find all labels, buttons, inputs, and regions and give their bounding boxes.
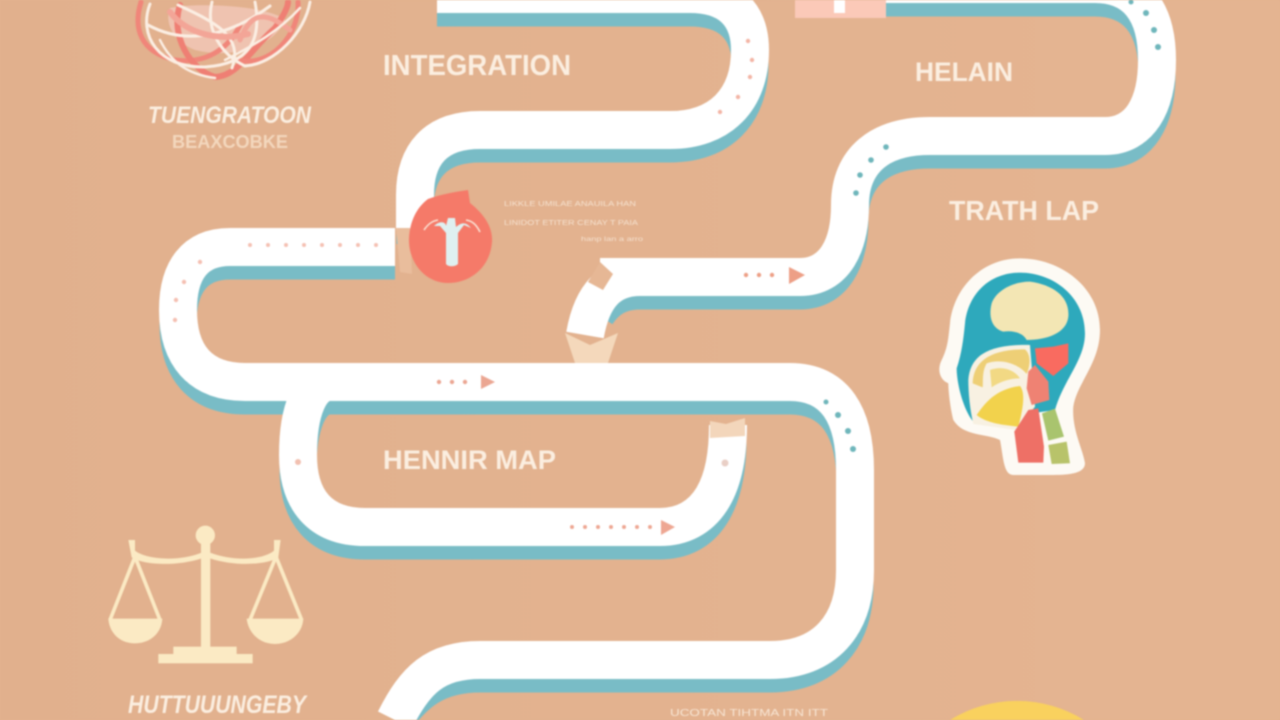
road stub: curve into central tab (585, 277, 640, 335)
subheading: tangle caption: BEAXCOBKE (172, 132, 288, 152)
road arrow: main horizontal (437, 375, 495, 389)
tab: notch at central road start (588, 262, 613, 290)
sinus pieces (973, 349, 1030, 387)
winding road: white path (178, 0, 1157, 720)
road segment: top centre (415, 0, 750, 230)
icon: balance scales (108, 526, 303, 663)
heading: tangle caption (148, 102, 312, 152)
throat upper (1035, 343, 1068, 376)
tab: pink label at top (795, 0, 886, 18)
brain (990, 282, 1068, 340)
road dots: left bend (173, 243, 378, 322)
face area (968, 345, 1035, 430)
road segment: right side (600, 0, 1157, 277)
icon: red circle with figure (396, 190, 492, 283)
tab: inner loop end (710, 418, 745, 438)
heading: balance caption: HUTTUUUNGEBY (128, 691, 308, 719)
heading: tangle caption: TUENGRATOON (148, 102, 312, 129)
road arrow: inner loop (570, 520, 675, 535)
text block: bottom caption: UCOTAN TIHTMA ITN ITT (670, 708, 828, 719)
icon: yellow circle at bottom (950, 701, 1084, 720)
road marker dots (295, 0, 1161, 466)
text block: beside red circle: hanp lan a arro (581, 237, 644, 243)
heading: helain: HELAIN (915, 57, 1013, 87)
road segment: inner loop (298, 382, 728, 527)
heading: integration: INTEGRATION (383, 50, 571, 82)
winding road: teal shadow layer (178, 0, 1157, 720)
road arrow: right segment (744, 267, 805, 284)
text block: beside red circle (504, 199, 644, 243)
text block: beside red circle: LINIDOT ETITER CENAY T PAIA (504, 218, 638, 227)
neck green (1042, 409, 1064, 441)
heading: hennir map: HENNIR MAP (383, 445, 556, 475)
icon: tangled scribble (138, 2, 310, 78)
mouth (977, 386, 1023, 427)
icon: head anatomy (939, 258, 1100, 475)
text block: beside red circle: LIKKLE UMILAE ANAUILA HAN (504, 199, 636, 208)
tab: central road end (565, 333, 618, 363)
heading: trath lap: TRATH LAP (949, 195, 1099, 226)
road segment: main long loop (178, 247, 855, 720)
road dots and arrow: top centre bend (718, 39, 754, 114)
